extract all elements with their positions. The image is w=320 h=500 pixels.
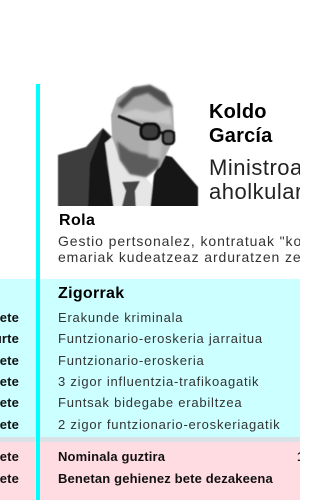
heading: Zigorrak: Zigorrak (58, 285, 124, 302)
section: role (58, 212, 300, 264)
portrait photo (57, 83, 199, 206)
heading: name: Koldo (209, 101, 267, 123)
sentences: crime list (58, 310, 280, 432)
crime row: Funtsak bidegabe erabiltzea (58, 395, 242, 410)
totals: left durations (0, 449, 19, 486)
divider band (0, 437, 300, 442)
crime row: Funtzionario-eroskeria (58, 353, 204, 368)
role title (209, 155, 300, 204)
role title: Ministroa (209, 155, 300, 180)
sentences: durations column (0, 310, 19, 432)
totals: labels (58, 449, 300, 486)
label: maximum served: Benetan gehienez bete dezakeena (58, 471, 273, 486)
label: nominal total: Nominala guztira (58, 449, 165, 464)
crime row: 2 zigor funtzionario-eroskeriagatik (58, 417, 280, 432)
panel: sentences background (0, 279, 300, 437)
panel: totals background (0, 442, 300, 500)
role description (58, 233, 300, 264)
heading: name (209, 101, 272, 147)
crime row: Funtzionario-eroskeria jarraitua (58, 331, 263, 346)
heading: name: García (209, 125, 272, 147)
crime row: 3 zigor influentzia-trafikoagatik (58, 374, 259, 389)
cyan vertical timeline line (36, 84, 40, 500)
crime row: Erakunde kriminala (58, 310, 183, 325)
heading: Rola: Rola (59, 212, 95, 229)
